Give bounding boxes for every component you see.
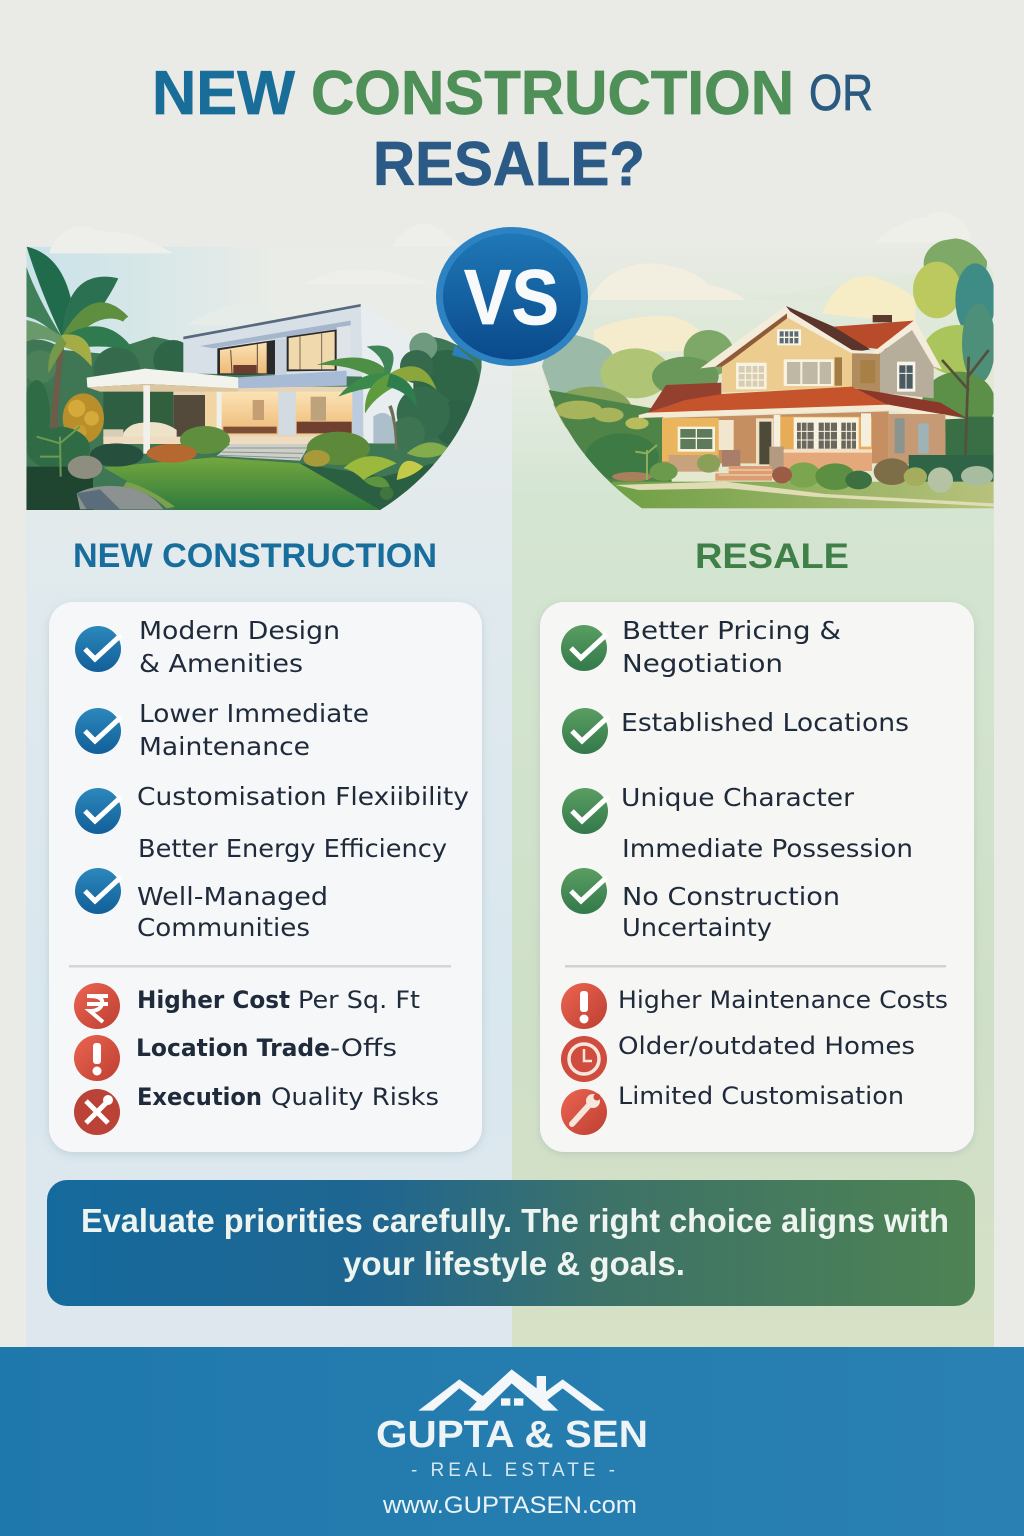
pro: better pricing — [561, 616, 841, 678]
con: higher cost: Higher Cost — [137, 986, 290, 1014]
pro: established locations — [562, 708, 909, 754]
upper body — [722, 316, 852, 393]
pro: lower maintenance: Lower Immediate — [139, 699, 369, 728]
pro: no construction uncertainty — [561, 868, 840, 942]
con: outdated homes: Older/outdated Homes — [618, 1032, 915, 1060]
column background: new construction — [26, 360, 512, 1350]
background trees — [542, 335, 619, 423]
panel: new construction — [49, 602, 482, 1152]
title: RESALE? — [373, 130, 645, 199]
pro: communities: Communities — [137, 913, 310, 942]
porch base — [784, 449, 872, 471]
upper windows — [777, 329, 801, 345]
pro: modern design: Modern Design — [139, 616, 340, 645]
pro: better pricing: Negotiation — [622, 649, 783, 678]
con: higher cost — [74, 983, 420, 1029]
logo: tagline: - REAL ESTATE - — [411, 1460, 615, 1481]
title — [152, 59, 873, 199]
website: www.GUPTASEN.com — [382, 1492, 637, 1519]
con: location trade-offs: Location Trade — [136, 1034, 330, 1062]
pro: communities — [75, 868, 328, 942]
lawn — [103, 457, 383, 510]
con: outdated homes — [561, 1032, 915, 1082]
pro: immediate possession: Immediate Possession — [622, 834, 913, 863]
upper roof — [834, 321, 914, 350]
logo: roofline icon — [418, 1369, 605, 1411]
pro: better pricing: Better Pricing & — [622, 616, 841, 645]
panel: resale — [540, 602, 974, 1152]
shrubs — [650, 462, 678, 481]
heading: resale: RESALE — [695, 537, 849, 576]
pro: lower maintenance — [75, 699, 369, 761]
porch columns — [774, 415, 780, 448]
rocks — [68, 456, 102, 479]
shrubs — [180, 426, 230, 454]
con: execution quality — [74, 1083, 439, 1135]
pro: customisation — [75, 782, 469, 834]
con: maintenance costs: Higher Maintenance Costs — [618, 986, 948, 1014]
title: OR — [809, 64, 873, 121]
house upper storey — [361, 304, 413, 443]
deck and steps — [103, 437, 317, 444]
roof slabs — [238, 371, 347, 388]
logo: company name: GUPTA & SEN — [376, 1414, 648, 1456]
carport car — [123, 422, 177, 437]
pro: customisation: Customisation Flexiibility — [137, 782, 469, 811]
VS badge — [436, 227, 588, 366]
pro: no construction uncertainty: Uncertainty — [622, 913, 772, 942]
con: limited customisation: Limited Customisation — [618, 1082, 904, 1110]
palm tree left — [50, 348, 64, 428]
con: execution quality: Execution — [137, 1083, 262, 1111]
callout banner: Evaluate priorities carefully. The right choice aligns with — [81, 1202, 949, 1239]
VS badge: VS — [464, 253, 559, 341]
pro: communities: Well-Managed — [137, 882, 328, 911]
heading: new construction: NEW CONSTRUCTION — [73, 537, 437, 575]
upper windows — [217, 340, 275, 375]
palm tree right — [388, 405, 397, 450]
con: execution quality: Quality Risks — [271, 1083, 439, 1111]
con: maintenance costs — [561, 983, 948, 1029]
callout banner: your lifestyle & goals. — [343, 1245, 685, 1282]
clouds — [50, 226, 173, 253]
title: CONSTRUCTION — [311, 59, 794, 128]
pro: established locations: Established Locations — [621, 708, 909, 737]
far trees — [26, 337, 483, 510]
foliage beside the house — [409, 333, 437, 361]
footer — [0, 1347, 1024, 1536]
pro: modern design: & Amenities — [139, 649, 303, 678]
con: limited customisation — [561, 1082, 904, 1135]
top right cloud — [874, 212, 972, 243]
lower roof — [648, 383, 721, 413]
title: NEW — [152, 59, 295, 128]
illustration: traditional resale house — [532, 212, 999, 512]
tropical leaves — [343, 456, 397, 480]
callout banner — [47, 1180, 975, 1306]
pro: unique character: Unique Character — [621, 783, 855, 812]
lower windows — [678, 427, 715, 452]
plant stems — [37, 427, 80, 477]
right trees — [924, 238, 987, 279]
lawn and path — [612, 482, 995, 510]
lower storey — [150, 387, 363, 443]
pro: energy efficiency: Better Energy Efficiency — [138, 834, 447, 863]
pro: lower maintenance: Maintenance — [139, 732, 310, 761]
door — [756, 418, 773, 465]
steps — [715, 466, 772, 481]
con: location trade-offs — [74, 1034, 397, 1081]
pro: no construction uncertainty: No Construction — [622, 882, 840, 911]
con: location trade-offs: -Offs — [330, 1034, 397, 1062]
lower walls — [662, 411, 889, 463]
pro: unique character — [562, 783, 855, 834]
con: higher cost: Per Sq. Ft — [298, 986, 420, 1014]
pro: modern design — [75, 616, 340, 678]
column background: resale — [512, 360, 994, 1350]
clouds — [589, 263, 745, 300]
illustration: modern new-build house — [26, 246, 482, 510]
